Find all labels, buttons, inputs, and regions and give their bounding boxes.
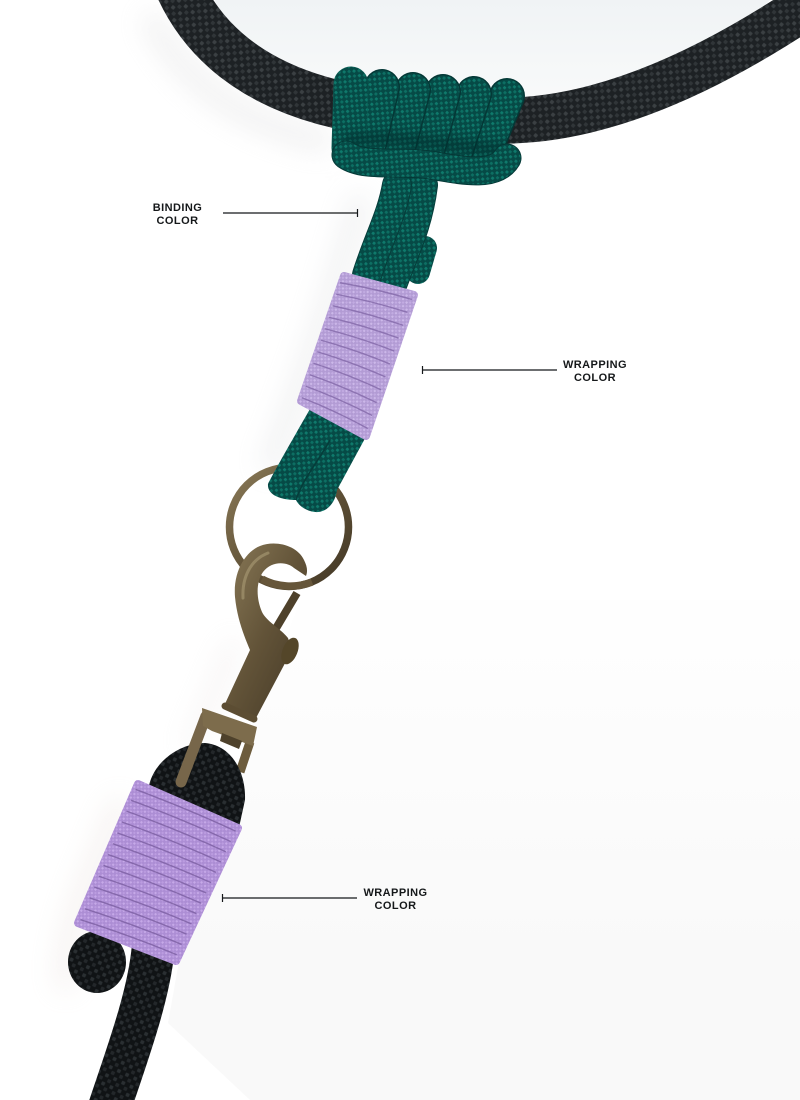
- swivel plate: [202, 708, 257, 746]
- hook body: [224, 544, 307, 718]
- upper wrapping color text: WRAPPING: [563, 359, 627, 371]
- hook gate rod: [275, 593, 297, 630]
- hook highlight: [243, 553, 268, 598]
- knot band shadow: [350, 139, 505, 150]
- lower wrapping: [78, 784, 238, 961]
- swivel back arm: [240, 742, 250, 772]
- label: upper wrapping color: [422, 359, 627, 384]
- lower wrapping color text: COLOR: [375, 900, 416, 912]
- upper wrapping color text: [563, 359, 627, 384]
- label: binding color: [153, 202, 358, 227]
- teal knot: [346, 84, 507, 171]
- brass ring: [230, 468, 348, 586]
- binding color text: [153, 202, 202, 227]
- label: lower wrapping color: [222, 887, 428, 912]
- black rope: tail loop: [68, 931, 126, 993]
- upper wrapping coil lines: [302, 283, 412, 428]
- black rope: lower tail: [108, 950, 153, 1100]
- swivel bracket: [181, 706, 257, 782]
- snap hook: [224, 544, 307, 718]
- lower wrapping body: [78, 784, 238, 961]
- lower wrapping color text: [363, 887, 428, 912]
- black rope: collar right: [485, 0, 800, 121]
- swivel pin: [220, 733, 242, 749]
- lower wrapping color text: WRAPPING: [363, 887, 428, 899]
- upper wrapping color text: COLOR: [574, 372, 616, 384]
- upper wrapping: [301, 276, 414, 436]
- teal lower strands: [268, 395, 375, 512]
- knot vertical strands: [349, 84, 507, 152]
- swivel left arm: [181, 716, 206, 782]
- black rope: collar left: [178, 0, 340, 105]
- swivel collar: [225, 706, 254, 719]
- binding color text: BINDING: [153, 202, 202, 214]
- black rope: end loop: [148, 743, 245, 832]
- binding color text: COLOR: [157, 215, 198, 227]
- upper wrapping color leader line: [422, 366, 557, 374]
- lower wrapping color leader line: [222, 894, 357, 902]
- ring front segment: [262, 579, 312, 586]
- upper wrapping body: [301, 276, 414, 436]
- binding color leader line: [223, 209, 358, 217]
- knot horizontal band: [346, 155, 507, 171]
- teal stem: [367, 185, 425, 285]
- hook screw: [278, 635, 302, 667]
- soft shadows: [66, 15, 362, 990]
- lower wrapping coil lines: [80, 789, 236, 955]
